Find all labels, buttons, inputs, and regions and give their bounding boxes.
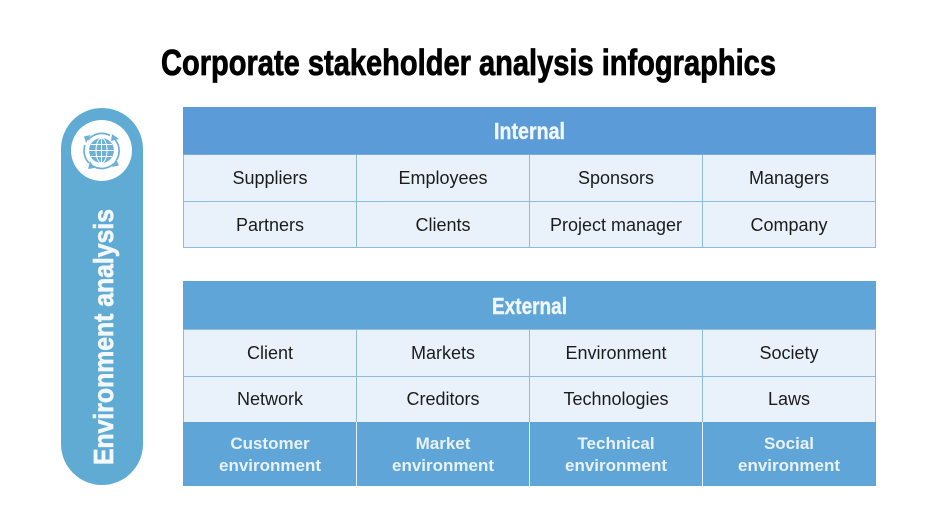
external footer categories: Social: [764, 434, 814, 453]
internal cells: Suppliers: [232, 168, 308, 188]
internal header: Internal: [494, 118, 565, 144]
panel: external table: [183, 281, 876, 486]
internal cells: Project manager: [550, 215, 682, 235]
external cells: Society: [759, 343, 819, 363]
external footer categories: environment: [219, 456, 321, 475]
internal cells: Managers: [749, 168, 829, 188]
external cells: Creditors: [406, 389, 480, 409]
external cells: [237, 343, 819, 409]
external footer categories: Technical: [577, 434, 655, 453]
panel: environment analysis pill: [61, 108, 143, 485]
internal cells: Sponsors: [578, 168, 654, 188]
external cells: Markets: [411, 343, 475, 363]
internal header: [183, 107, 876, 154]
external cells: Network: [237, 389, 304, 409]
internal cells: Company: [750, 215, 828, 235]
internal cells: Employees: [398, 168, 488, 188]
external footer categories: environment: [565, 456, 667, 475]
internal cells: [232, 168, 829, 235]
external footer categories: environment: [738, 456, 840, 475]
vertical label: Environment analysis: [88, 209, 119, 465]
internal cells: Clients: [415, 215, 471, 235]
external cells: Client: [247, 343, 293, 363]
panel: internal table: [183, 107, 876, 248]
icon: globe with circular arrows: [71, 120, 132, 181]
external cells: Laws: [768, 389, 810, 409]
external cells: Technologies: [563, 389, 669, 409]
external header: [183, 281, 876, 329]
internal cells: Partners: [236, 215, 304, 235]
external footer categories: Customer: [230, 434, 310, 453]
external cells: Environment: [565, 343, 667, 363]
title: Corporate stakeholder analysis infographics: [161, 42, 776, 83]
external footer categories: Market: [416, 434, 471, 453]
external header: External: [492, 293, 567, 319]
external footer categories: environment: [392, 456, 494, 475]
external footer categories: [183, 422, 876, 486]
